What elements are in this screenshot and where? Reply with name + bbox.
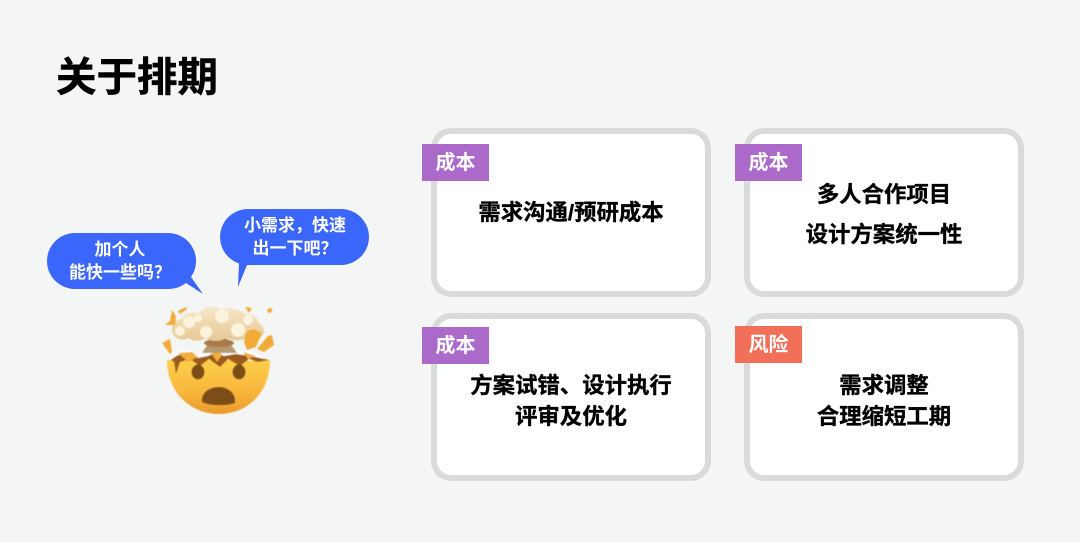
mouth bbox=[202, 387, 235, 405]
bubble text: left: 加个人 bbox=[94, 240, 146, 259]
head bbox=[167, 360, 270, 414]
eyes bbox=[192, 364, 204, 380]
panel: trial and review bbox=[431, 313, 711, 481]
mushroom cloud bbox=[172, 307, 264, 341]
mushroom stem bbox=[202, 338, 237, 353]
text: trial and review: 评审及优化 bbox=[515, 404, 627, 429]
skull fragments bbox=[162, 307, 274, 354]
tag: risk bbox=[735, 326, 802, 363]
tag: cost 2 bbox=[735, 144, 802, 181]
text: trial and review bbox=[470, 373, 672, 429]
tag: cost 3: 成本 bbox=[436, 335, 476, 357]
text: communication cost: 需求沟通/预研成本 bbox=[478, 200, 664, 225]
text: schedule risk: 合理缩短工期 bbox=[817, 404, 951, 429]
tag: cost 2: 成本 bbox=[748, 152, 788, 174]
title: 关于排期 bbox=[56, 54, 218, 100]
tag: cost 3 bbox=[422, 327, 489, 364]
panel: communication cost bbox=[431, 128, 711, 297]
text: collaboration: 多人合作项目 bbox=[817, 182, 951, 207]
tag: risk: 风险 bbox=[748, 334, 788, 356]
broken rim bbox=[171, 352, 269, 374]
bubble text: left: 能快一些吗？ bbox=[69, 263, 171, 282]
text: schedule risk: 需求调整 bbox=[839, 373, 929, 398]
text: schedule risk bbox=[817, 373, 951, 429]
text: trial and review: 方案试错、设计执行 bbox=[470, 373, 672, 398]
text: collaboration bbox=[806, 182, 962, 247]
white cracks bbox=[176, 346, 264, 361]
bubble text: left bbox=[69, 240, 171, 282]
panel: schedule risk bbox=[744, 313, 1024, 481]
panel: multi-person collaboration bbox=[744, 128, 1024, 297]
bubble text: right: 小需求，快速 bbox=[244, 216, 346, 235]
text: collaboration: 设计方案统一性 bbox=[806, 222, 962, 247]
bubble text: right: 出一下吧？ bbox=[252, 239, 338, 258]
bubble text: right bbox=[244, 216, 346, 258]
tag: cost 1: 成本 bbox=[436, 152, 476, 174]
tag: cost 1 bbox=[422, 144, 489, 181]
